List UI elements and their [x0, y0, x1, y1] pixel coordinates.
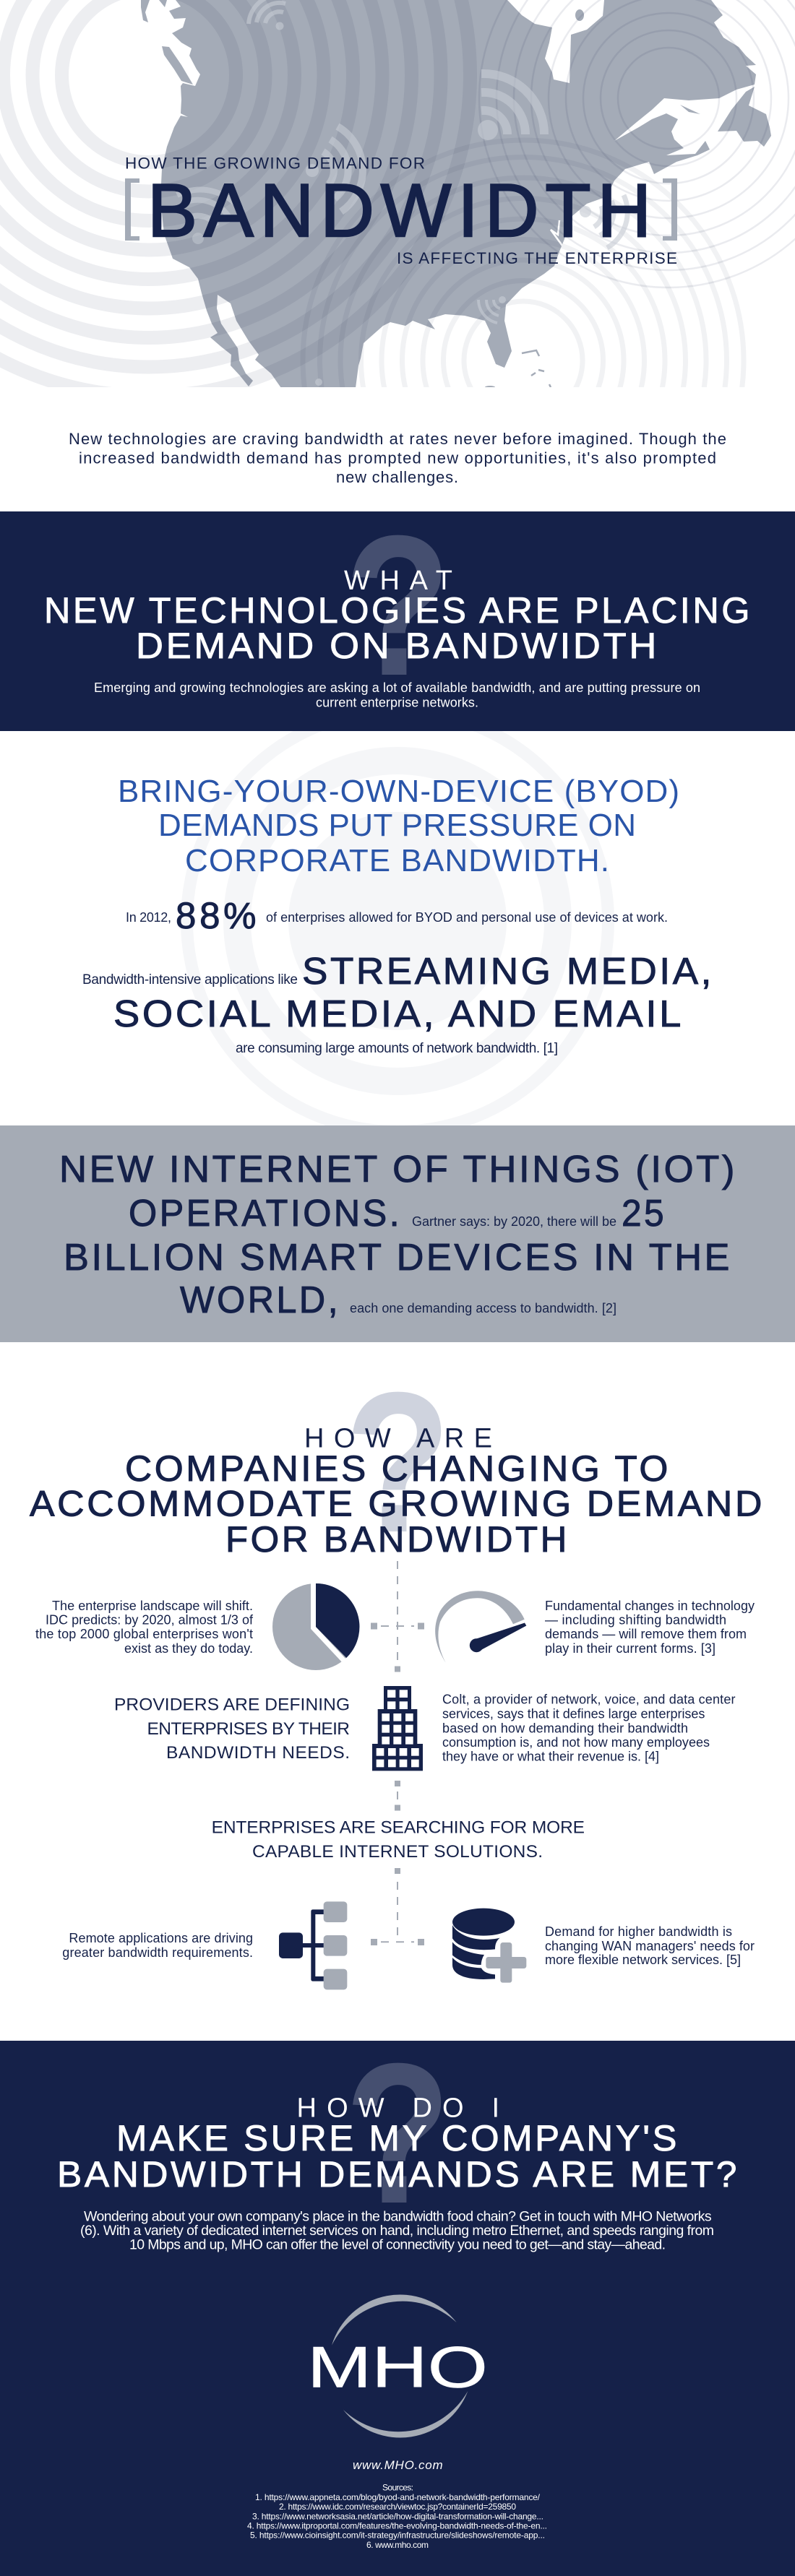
- heading: NEW TECHNOLOGIES ARE PLACING: [44, 590, 752, 631]
- sources list: 6. www.mho.com: [366, 2540, 429, 2550]
- text: fundamental changes: play in their current forms. [3]: [545, 1641, 716, 1656]
- call to action paragraph: [80, 2209, 714, 2253]
- logo: MHO: MHO: [307, 2335, 488, 2400]
- intro paragraph: increased bandwidth demand has prompted new opportunities, it's also prompted: [79, 449, 716, 467]
- panel: internet of things: [0, 1125, 795, 1342]
- sources list: 3. https://www.networksasia.net/article/how-digital-transformation-will-change...: [252, 2511, 543, 2521]
- text: colt description: based on how demanding their bandwidth: [442, 1721, 688, 1735]
- text: colt description: services, says that it defines large enterprises: [442, 1706, 705, 1721]
- streaming media statement: SOCIAL MEDIA, AND EMAIL: [113, 993, 684, 1035]
- section description: Emerging and growing technologies are asking a lot of available bandwidth, and are putting pressure on: [94, 680, 700, 695]
- hero panel: map of North America with signal rings: [0, 0, 795, 387]
- text: fundamental changes: Fundamental changes in technology: [545, 1599, 755, 1613]
- IoT statement text: OPERATIONS.: [129, 1193, 402, 1235]
- text: enterprise landscape: IDC predicts: by 2020, almost 1/3 of: [46, 1613, 254, 1628]
- text: remote applications: Remote applications are driving: [69, 1931, 253, 1945]
- text: enterprise landscape: exist as they do today.: [124, 1641, 253, 1656]
- subheading: enterprises searching: CAPABLE INTERNET SOLUTIONS.: [252, 1842, 543, 1862]
- intro paragraph: New technologies are craving bandwidth at rates never before imagined. Though the: [69, 430, 726, 448]
- sources list: [247, 2483, 547, 2550]
- concentric rings background: [186, 711, 609, 1131]
- sources list: 4. https://www.itproportal.com/features/the-evolving-bandwidth-needs-of-the-en...: [247, 2520, 547, 2530]
- subheading: providers are defining enterprises: BANDWIDTH NEEDS.: [166, 1743, 350, 1763]
- signal rings: lower right set: [301, 137, 746, 387]
- call to action paragraph: 10 Mbps and up, MHO can offer the level of connectivity you need to get—and stay—ahead.: [129, 2237, 666, 2253]
- question mark watermark: ?: [345, 2021, 451, 2245]
- IoT statement text: each one demanding access to bandwidth. [2]: [350, 1301, 616, 1315]
- text: enterprise landscape: The enterprise landscape will shift.: [52, 1599, 253, 1613]
- subheading: providers are defining enterprises: ENTERPRISES BY THEIR: [147, 1719, 350, 1739]
- text: fundamental changes: — including shifting bandwidth: [545, 1613, 726, 1628]
- text: demand for higher bandwidth: [545, 1924, 755, 1967]
- map of North America: [141, 0, 771, 389]
- stat: 88 percent: 88%: [176, 895, 259, 936]
- streaming media statement: are consuming large amounts of network bandwidth. [1]: [236, 1041, 558, 1056]
- wifi icons scattered on map: [177, 0, 627, 386]
- call to action paragraph: Wondering about your own company's place in the bandwidth food chain? Get in touch with MHO Networks: [84, 2209, 712, 2225]
- dashed connector lines: [371, 1561, 424, 1945]
- text: fundamental changes: [545, 1599, 755, 1656]
- icon: network hierarchy: [279, 1901, 347, 1989]
- heading: MAKE SURE MY COMPANY'S: [116, 2118, 679, 2158]
- panel: BYOD: [82, 711, 714, 1131]
- heading: [30, 1448, 765, 1560]
- IoT statement text: [59, 1149, 737, 1321]
- text: fundamental changes: demands — will remove them from: [545, 1627, 747, 1641]
- text: remote applications: greater bandwidth requirements.: [62, 1945, 253, 1960]
- website link text: www.MHO.com: [353, 2458, 443, 2472]
- text: enterprise landscape: the top 2000 global enterprises won't: [35, 1627, 253, 1641]
- text: remote applications: [62, 1931, 253, 1960]
- stat: 88 percent: [126, 895, 668, 936]
- right bracket: [663, 178, 677, 241]
- question mark watermark: ?: [345, 493, 451, 717]
- panel: how are companies changing heading: [30, 1350, 765, 1574]
- title line: how the growing demand for: HOW THE GROWING DEMAND FOR: [125, 155, 425, 172]
- text: demand for higher bandwidth: more flexible network services. [5]: [545, 1953, 741, 1967]
- sources list: Sources:: [382, 2483, 413, 2493]
- streaming media statement: Bandwidth-intensive applications like: [82, 972, 298, 987]
- streaming media statement: STREAMING MEDIA,: [302, 951, 714, 993]
- title line: is affecting the enterprise: IS AFFECTING THE ENTERPRISE: [397, 249, 677, 267]
- BYOD heading: BRING-YOUR-OWN-DEVICE (BYOD): [118, 774, 679, 809]
- stat: 88 percent: of enterprises allowed for BYOD and personal use of devices at work.: [266, 910, 668, 925]
- heading kicker: how do I: HOW DO I: [296, 2093, 499, 2123]
- title word: bandwidth: BANDWIDTH: [147, 169, 658, 253]
- subheading: providers are defining enterprises: [114, 1695, 350, 1763]
- icon: speedometer gauge: [435, 1591, 526, 1663]
- heading: DEMAND ON BANDWIDTH: [136, 626, 659, 666]
- text: demand for higher bandwidth: changing WAN managers' needs for: [545, 1939, 755, 1953]
- heading: [57, 2118, 739, 2195]
- question mark watermark: ?: [345, 1350, 451, 1574]
- streaming media statement: [82, 951, 714, 1056]
- subheading: providers are defining enterprises: PROVIDERS ARE DEFINING: [114, 1695, 350, 1715]
- section description: [94, 680, 700, 709]
- IoT statement text: WORLD,: [180, 1279, 340, 1321]
- text: colt description: Colt, a provider of network, voice, and data center: [442, 1692, 736, 1706]
- heading: [44, 590, 752, 666]
- text: enterprise landscape: [35, 1599, 254, 1656]
- icon: office building: [372, 1686, 423, 1771]
- logo: MHO: [307, 2294, 488, 2437]
- call to action paragraph: (6). With a variety of dedicated internet services on hand, including metro Ethernet, and speeds ranging from: [80, 2223, 714, 2239]
- sources list: 5. https://www.cioinsight.com/it-strategy/infrastructure/slideshows/remote-app...: [250, 2530, 545, 2541]
- IoT statement text: NEW INTERNET OF THINGS (IOT): [59, 1149, 737, 1190]
- heading kicker: what: WHAT: [344, 566, 452, 596]
- BYOD heading: [118, 774, 679, 878]
- text: colt description: [442, 1692, 736, 1764]
- BYOD heading: CORPORATE BANDWIDTH.: [185, 843, 609, 878]
- intro paragraph: new challenges.: [336, 468, 458, 486]
- sources list: 1. https://www.appneta.com/blog/byod-and-network-bandwidth-performance/: [255, 2492, 541, 2502]
- subheading: enterprises searching: ENTERPRISES ARE SEARCHING FOR MORE: [212, 1818, 585, 1838]
- subheading: enterprises searching: [212, 1818, 585, 1862]
- stat: 88 percent: In 2012,: [126, 910, 171, 925]
- heading kicker: how are: HOW ARE: [304, 1423, 492, 1453]
- signal rings: thin upper right set: [479, 0, 795, 288]
- text: demand for higher bandwidth: Demand for higher bandwidth is: [545, 1924, 732, 1939]
- panel: what new technologies: [0, 493, 795, 731]
- signal rings: large left set: [0, 0, 470, 396]
- section description: current enterprise networks.: [316, 695, 478, 709]
- BYOD heading: DEMANDS PUT PRESSURE ON: [158, 808, 636, 843]
- IoT statement text: 25: [622, 1193, 666, 1235]
- left bracket: [125, 178, 139, 241]
- heading: FOR BANDWIDTH: [225, 1519, 570, 1560]
- panel: how do I: [0, 2021, 795, 2576]
- icon: database with plus: [452, 1909, 526, 1983]
- intro paragraph: [69, 430, 726, 486]
- IoT statement text: BILLION SMART DEVICES IN THE: [64, 1237, 732, 1279]
- hero title: [125, 155, 677, 267]
- IoT statement text: Gartner says: by 2020, there will be: [412, 1214, 616, 1229]
- heading: ACCOMMODATE GROWING DEMAND: [30, 1484, 765, 1524]
- heading: COMPANIES CHANGING TO: [125, 1448, 671, 1489]
- icon: pie chart: [272, 1578, 359, 1670]
- text: colt description: consumption is, and not how many employees: [442, 1735, 710, 1750]
- heading: BANDWIDTH DEMANDS ARE MET?: [57, 2154, 739, 2195]
- text: colt description: they have or what their revenue is. [4]: [442, 1750, 659, 1764]
- sources list: 2. https://www.idc.com/research/viewtoc.jsp?containerId=259850: [279, 2502, 516, 2512]
